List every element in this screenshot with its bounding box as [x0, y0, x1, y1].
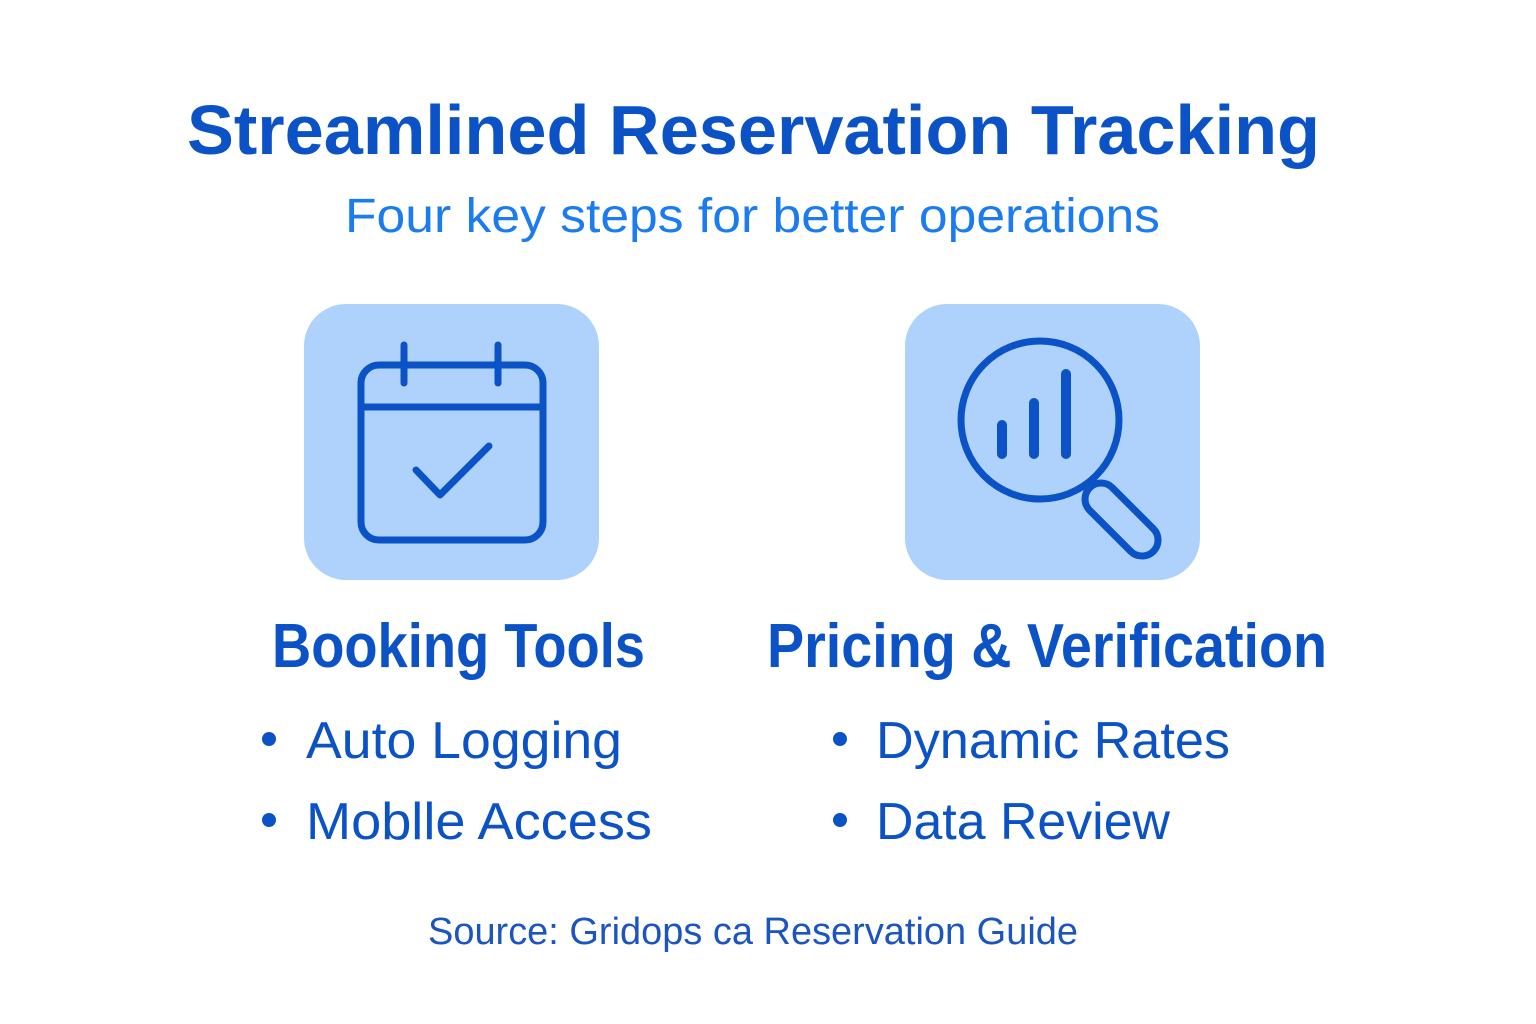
bullet list: booking tools: Moblle Access: [306, 793, 652, 851]
icon: calendar: [304, 304, 599, 580]
subtitle: Four key steps for better operations: [345, 190, 1160, 243]
source note: Source: Gridops ca Reservation Guide: [428, 911, 1078, 953]
bullet list: pricing: Dynamic Rates: [876, 712, 1230, 770]
bullet list: booking tools: Auto Logging: [306, 712, 622, 770]
bullet list: pricing: [833, 712, 1230, 851]
title: Streamlined Reservation Tracking: [187, 91, 1320, 169]
panel: pricing & verification: [767, 304, 1327, 851]
icon: magnifier with chart: [905, 304, 1200, 580]
panel: booking tools: [262, 304, 652, 851]
bullet list: pricing: Data Review: [876, 793, 1170, 851]
heading: booking tools: Booking Tools: [272, 612, 645, 681]
heading: pricing & verification: Pricing & Verification: [767, 612, 1327, 681]
bullet list: booking tools: [262, 712, 652, 851]
